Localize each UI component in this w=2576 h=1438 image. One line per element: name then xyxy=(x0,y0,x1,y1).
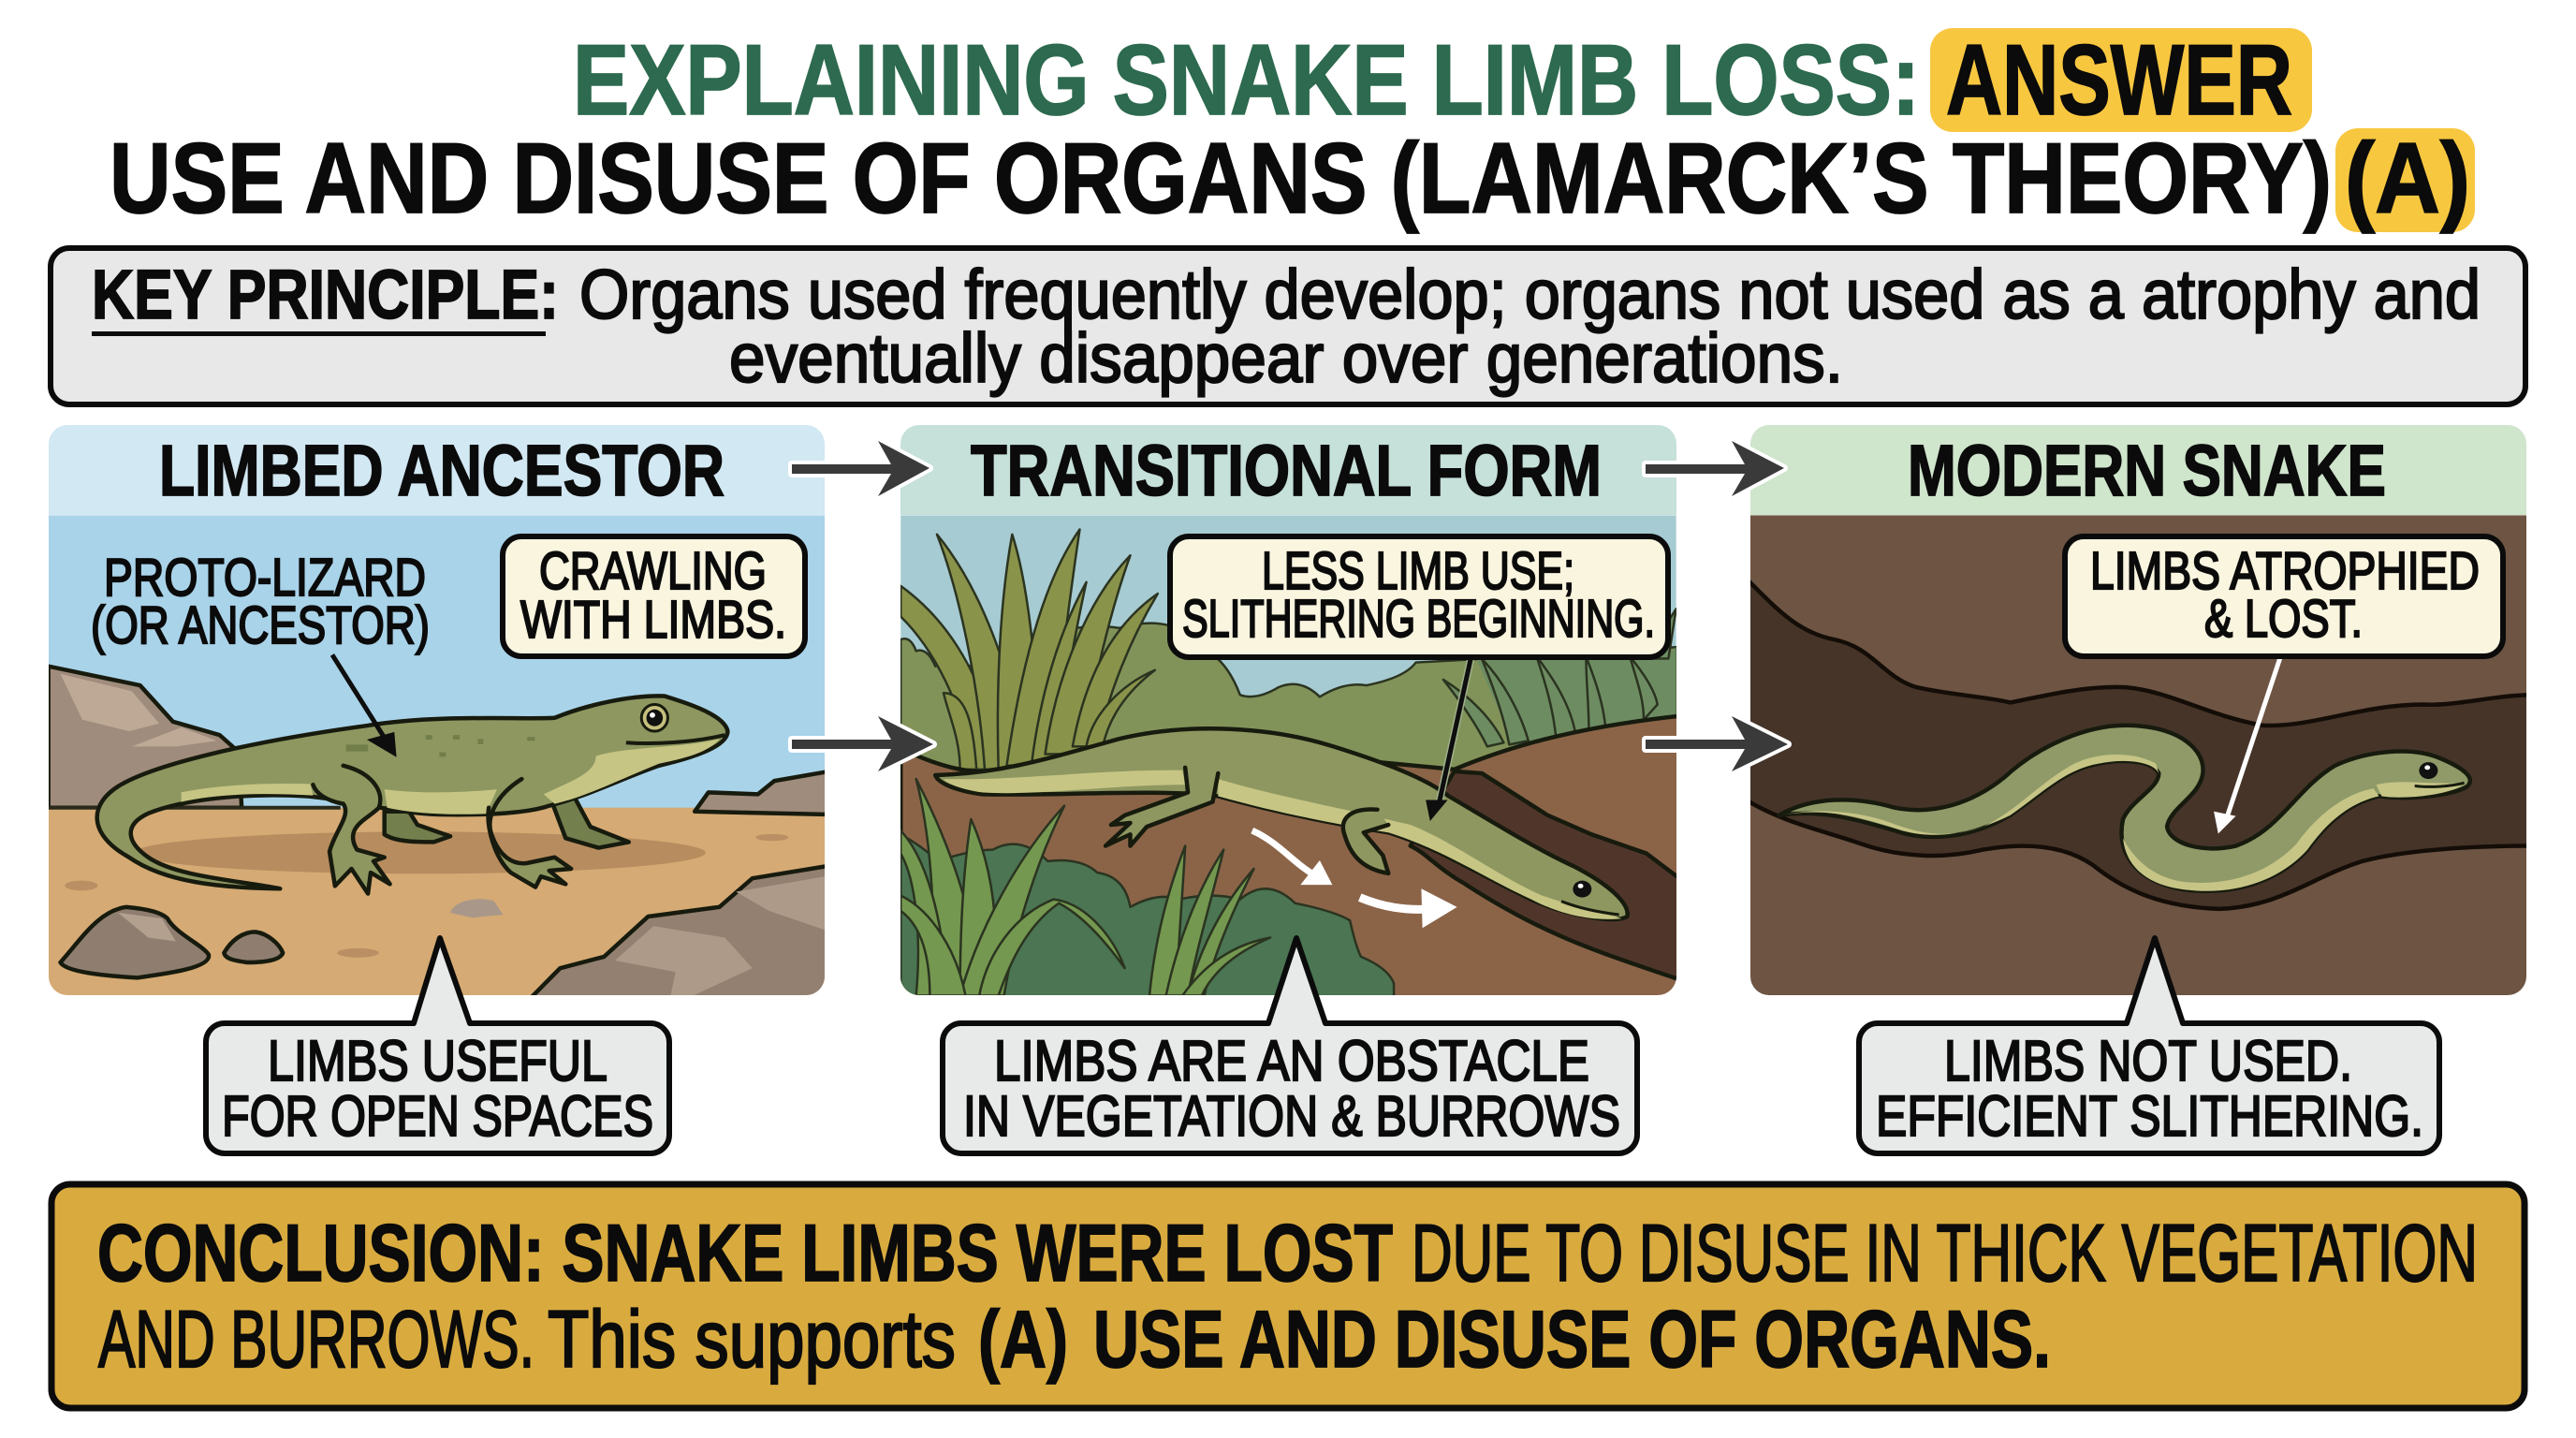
heading: transitional form: TRANSITIONAL FORM xyxy=(971,431,1602,511)
white pointer arrow xyxy=(2214,658,2280,833)
conclusion box xyxy=(51,1184,2525,1408)
lower grass blades xyxy=(900,779,1270,996)
conclusion text: AND BURROWS. xyxy=(98,1295,534,1385)
callout: limbs atrophied: LIMBS ATROPHIED xyxy=(2090,541,2480,601)
conclusion text: CONCLUSION: SNAKE LIMBS WERE LOST xyxy=(97,1209,1393,1299)
answer badge: ANSWER xyxy=(1946,23,2292,136)
callout: less limb use xyxy=(1170,536,1668,657)
panel: modern snake xyxy=(1746,425,2533,997)
callout: crawling with limbs: CRAWLING xyxy=(539,541,767,601)
speech bubble: limbs are an obstacle: LIMBS ARE AN OBSTACLE xyxy=(994,1029,1589,1093)
speech bubble: limbs useful: FOR OPEN SPACES xyxy=(222,1084,653,1148)
speech bubble: limbs are an obstacle xyxy=(943,938,1637,1153)
key principle text xyxy=(579,256,2481,397)
title xyxy=(110,23,2475,234)
bottom left rocks xyxy=(61,907,283,977)
right distant rock xyxy=(695,771,829,814)
lizard xyxy=(97,696,727,894)
panel header background xyxy=(1750,425,2526,515)
panel: limbed ancestor xyxy=(49,425,829,999)
callout: limbs atrophied xyxy=(2065,536,2503,656)
conclusion text: This supports xyxy=(548,1295,956,1385)
speech bubble: limbs not used: LIMBS NOT USED. xyxy=(1944,1029,2352,1093)
scene: vegetation and burrow with transitional lizard xyxy=(900,515,1679,999)
label: proto-lizard xyxy=(91,548,430,655)
callout: limbs atrophied: & LOST. xyxy=(2204,589,2363,649)
title line 1: EXPLAINING SNAKE LIMB LOSS: xyxy=(573,23,1920,136)
burrow tunnel xyxy=(1746,579,2533,909)
left rocks xyxy=(49,667,242,808)
panel header background xyxy=(900,425,1676,515)
speech bubble: limbs not used: EFFICIENT SLITHERING. xyxy=(1876,1084,2423,1148)
speech bubble: limbs useful xyxy=(206,938,669,1153)
ground shadow xyxy=(135,831,706,873)
callout: crawling with limbs xyxy=(503,536,805,656)
lizard xyxy=(935,728,1628,919)
scene: underground burrow with snake xyxy=(1746,515,2533,997)
top-left grass blades xyxy=(900,530,1158,770)
background bushes xyxy=(900,624,1676,777)
pointer arrow to lizard xyxy=(332,654,397,757)
snake xyxy=(1779,726,2470,891)
heading: modern snake: MODERN SNAKE xyxy=(1908,431,2386,511)
lower bush xyxy=(900,834,1394,999)
heading: limbed ancestor: LIMBED ANCESTOR xyxy=(159,431,724,511)
ground xyxy=(49,808,825,996)
arrow: transitional to modern, top xyxy=(1646,441,1784,496)
scene: open land with lizard xyxy=(49,515,829,999)
key principle box xyxy=(51,248,2525,404)
pointer arrow to limb xyxy=(1426,658,1471,821)
speech bubble: limbs are an obstacle: IN VEGETATION & BURROWS xyxy=(963,1084,1620,1148)
arrow: ancestor to transitional, top xyxy=(792,441,929,496)
label: proto-lizard: PROTO-LIZARD xyxy=(104,548,426,608)
conclusion text: USE AND DISUSE OF ORGANS. xyxy=(1093,1295,2051,1385)
key principle text: Organs used frequently develop; organs not used as a atrophy and xyxy=(579,256,2481,333)
callout: less limb use: SLITHERING BEGINNING. xyxy=(1182,589,1655,649)
burrow xyxy=(1411,771,1679,979)
arrow: transitional to modern, middle xyxy=(1646,716,1788,771)
panel: transitional form xyxy=(900,425,1679,999)
key principle label: KEY PRINCIPLE: xyxy=(92,256,559,333)
speech bubble: limbs not used xyxy=(1859,938,2439,1153)
callout: crawling with limbs: WITH LIMBS. xyxy=(520,590,786,650)
callout: less limb use: LESS LIMB USE; xyxy=(1262,541,1574,601)
conclusion text: (A) xyxy=(978,1295,1068,1385)
conclusion text xyxy=(97,1209,2478,1385)
panel header background xyxy=(49,425,825,515)
key principle text: eventually disappear over generations. xyxy=(729,319,1843,397)
bottom right rock xyxy=(530,866,829,999)
right grass xyxy=(1443,609,1676,746)
speech bubble: limbs useful: LIMBS USEFUL xyxy=(268,1029,607,1093)
ground xyxy=(900,716,1679,999)
arrow: ancestor to transitional, middle xyxy=(792,716,933,771)
slither motion arrows xyxy=(1252,830,1457,928)
label: proto-lizard: (OR ANCESTOR) xyxy=(91,595,430,655)
option A badge: (A) xyxy=(2345,122,2470,234)
